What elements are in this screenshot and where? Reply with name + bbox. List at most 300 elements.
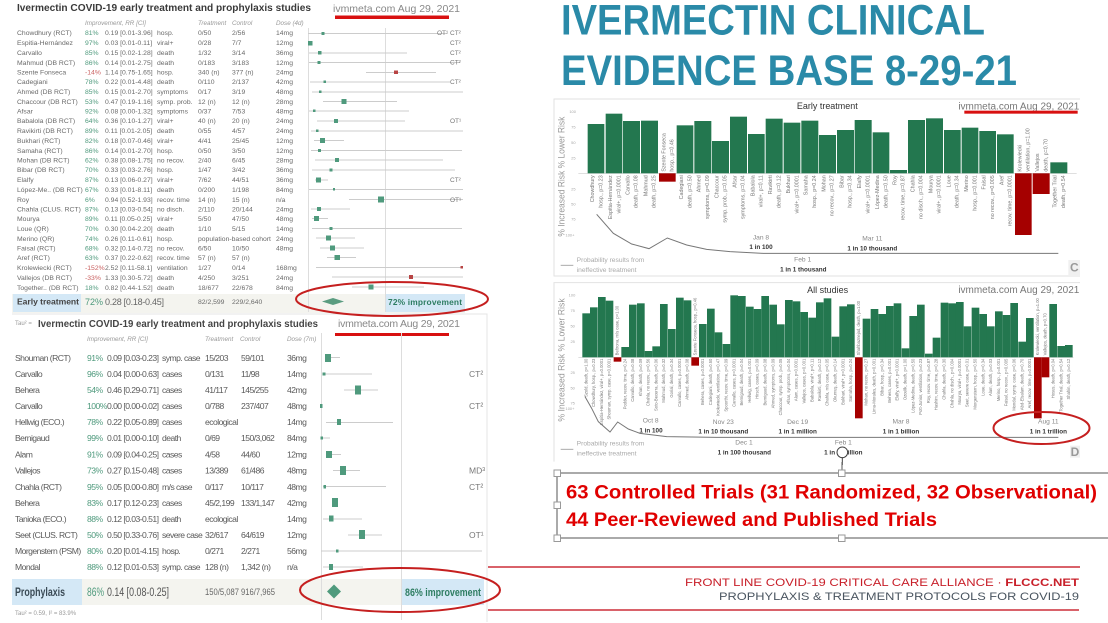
table rows: early treatment studies: Cadegiani (17, 79, 48, 86)
probability annotations: 1 in 10 thousand (698, 429, 748, 436)
study labels: Roy, recov. time, p=0.87 (926, 358, 931, 403)
table rows: early treatment studies: 97% (85, 40, 99, 47)
chart heading: Early treatment (797, 101, 858, 111)
table rows: early treatment studies: hosp. (157, 148, 174, 155)
table rows: early treatment studies: 0.82 [0.44-1.52] (105, 285, 153, 292)
table rows: early treatment studies: 1/32 (198, 50, 211, 57)
study labels: viral+, p=0.0001 (616, 175, 622, 214)
study labels: Together Trial, death, p=0.54 (1058, 358, 1063, 412)
table rows: early treatment studies: hosp. (157, 236, 174, 243)
study labels: Chahla, m/s case, p=0.05 (825, 358, 830, 406)
study labels: Bibar (839, 175, 845, 188)
summary row: prophylaxis: 86% improvement (405, 587, 481, 599)
table rows: prophylaxis studies: 91% (87, 450, 103, 460)
study labels: Gorial, death, p=0.34 (669, 358, 674, 398)
table rows: early treatment studies: Merino (QR) (17, 236, 54, 243)
probability annotations (749, 234, 897, 273)
table rows: early treatment studies: Ravikirti (DB RCT) (17, 128, 73, 135)
table rows: early treatment studies: 3/42 (232, 167, 245, 174)
table rows: prophylaxis studies: 150/3,062 (241, 433, 275, 443)
table rows: early treatment studies: 0.36 [0.10-1.27] (105, 118, 153, 125)
y axis: 50 (570, 386, 576, 391)
probability annotations: Nov 23 (713, 419, 734, 426)
table rows: early treatment studies: Afsar (17, 108, 34, 116)
table rows: early treatment studies: Chahla (CLUS. RCT) (17, 206, 81, 214)
panel letter D: D (1071, 445, 1080, 459)
table rows: prophylaxis studies: 0.17 [0.12-0.23] (107, 498, 159, 508)
study labels: Aref (999, 175, 1005, 185)
study labels: Bukhari, viral+, p=0.0001 (840, 358, 845, 405)
table rows: prophylaxis studies: 133/1,147 (241, 498, 275, 508)
table rows: early treatment studies: 7/62 (198, 177, 211, 184)
y axis: 100 (569, 109, 577, 114)
study labels: Faisal (982, 175, 988, 190)
table rows: early treatment studies: -152% (85, 265, 105, 272)
study labels: Ravikirti (768, 175, 774, 194)
table rows: prophylaxis studies: 0.09 [0.04-0.25] (107, 450, 159, 460)
table rows: prophylaxis studies: Carvallo (15, 401, 43, 411)
probability annotations: Mar 11 (862, 235, 883, 242)
table rows: prophylaxis studies: ecological (205, 417, 238, 427)
panel: chart C early treatment (554, 99, 1080, 276)
y axis: 75 (571, 217, 576, 222)
table rows: early treatment studies: 3/14 (232, 50, 245, 57)
icon: rotate cursor handle (837, 447, 848, 465)
table rows: early treatment studies: 87% (85, 177, 99, 184)
probability annotations: Mar 8 (892, 419, 910, 426)
table rows: prophylaxis studies: 0.46 [0.29-0.71] (107, 385, 159, 395)
probability annotations: Dec 1 (735, 440, 753, 447)
table rows: prophylaxis studies: 73% (87, 466, 103, 476)
table rows: early treatment studies: Mourya (17, 216, 40, 223)
study labels: recov. time, p=0.0001 (1008, 175, 1014, 226)
risk-of-bias notes: CT² (450, 40, 462, 47)
study labels: Chaccour, symp. prob., p=0.05 (778, 358, 783, 415)
table rows: early treatment studies: 1.14 [0.75-1.65] (105, 70, 153, 76)
study labels: death, p=0.50 (687, 175, 693, 208)
study labels: Afsar, symptoms, p=0.04 (786, 358, 791, 405)
panel: early treatment forest table (12, 3, 465, 313)
table rows: prophylaxis studies: 48mg (287, 482, 307, 492)
table rows: early treatment studies: n/a (276, 197, 286, 204)
table rows: early treatment studies: 3/19 (232, 89, 245, 96)
study labels: Hashim, recov. time, p=0.28 (934, 358, 939, 410)
study labels: Loue (946, 175, 952, 187)
table rows: early treatment studies: -33% (85, 275, 101, 282)
forest plot: prophylaxis (320, 333, 482, 620)
risk-of-bias notes: OT¹ (450, 118, 462, 125)
study labels: Mondal, symp. case, p=0.06 (1011, 358, 1016, 411)
table rows: early treatment studies: 14mg (276, 30, 293, 37)
table rows: prophylaxis studies: 0.00 [0.00-0.02] (107, 401, 159, 411)
y axis: 100+ (566, 232, 575, 237)
table rows: prophylaxis studies: 42mg (287, 498, 307, 508)
table rows: early treatment studies: 340 (n) (198, 70, 220, 76)
table rows: early treatment studies: 0.38 [0.08-1.75] (105, 158, 153, 164)
study labels: hosp., p=0.23 (598, 175, 604, 208)
study labels: Hosus, death, p=0.04 (1050, 358, 1055, 398)
study labels: Carvallo, cases, p=0.0001 (677, 358, 682, 407)
table rows: early treatment studies: death (157, 275, 174, 282)
summary row: early treatment: 72% improvement (388, 297, 462, 307)
table rows: early treatment studies: 0.94 [0.52-1.93] (105, 197, 153, 204)
table rows: early treatment studies: 0/14 (232, 265, 245, 272)
table rows: early treatment studies: -14% (85, 70, 101, 76)
table rows: early treatment studies: 78% (85, 79, 99, 86)
table rows: prophylaxis studies: 91% (87, 353, 103, 363)
risk-of-bias notes: OT¹ (469, 530, 484, 540)
study labels: symp. prob., p=0.05 (723, 175, 729, 223)
probability annotations: 1 in 100 (639, 427, 663, 434)
table rows: early treatment studies: 0.08 [0.00-1.32] (105, 108, 153, 116)
y axis: % Increased Risk % Lower Risk (556, 116, 566, 237)
study labels: Alam, death, p=0.03 (988, 358, 993, 396)
table rows: prophylaxis studies: 0.01 [0.00-0.10] (107, 433, 159, 443)
study labels: symptoms, p=0.09 (705, 175, 711, 219)
table rows: early treatment studies: 1/10 (198, 226, 211, 233)
table rows: prophylaxis studies: 0.05 [0.00-0.80] (107, 482, 159, 492)
study labels: López-Medina, death, p=0.50 (910, 358, 915, 413)
table rows: prophylaxis studies: 145/255 (241, 385, 269, 395)
table rows: early treatment studies: symptoms (157, 89, 189, 96)
table rows: early treatment studies: 84mg (276, 187, 293, 194)
source: ivmmeta date: ivmmeta.com Aug 29, 2021 (958, 285, 1080, 296)
table rows: early treatment studies: no recov. (157, 246, 185, 252)
study labels: Mohan (821, 175, 827, 192)
table rows: early treatment studies: 14mg (276, 226, 293, 233)
table rows: prophylaxis studies: 14mg (287, 369, 307, 379)
table rows: early treatment studies: 0.15 [0.02-1.28] (105, 50, 153, 57)
column headers: Control (240, 336, 261, 343)
legend: probability line (561, 257, 645, 274)
study labels: Mourya, viral+, p=0.0001 (957, 358, 962, 405)
table rows: early treatment studies: recov. time (157, 197, 190, 204)
table rows: prophylaxis studies: 64/619 (241, 530, 265, 540)
study labels: death, p=0.50 (883, 175, 889, 208)
table rows: early treatment studies: 0.37 [0.22-0.62] (105, 255, 153, 262)
table rows: prophylaxis studies: 83% (87, 498, 103, 508)
table rows: prophylaxis studies: cases (162, 417, 182, 427)
callout: red ellipse early treatment (296, 282, 488, 316)
summary row: prophylaxis (12, 579, 484, 605)
table rows: prophylaxis studies: 0.22 [0.05-0.89] (107, 417, 159, 427)
table rows: prophylaxis studies: 95% (87, 482, 103, 492)
risk-of-bias notes: CT² (469, 401, 483, 411)
callout box: trial counts (554, 462, 1108, 542)
table rows: early treatment studies: 0.33 [0.03-2.76] (105, 167, 153, 174)
table rows: prophylaxis studies: 56mg (287, 546, 307, 556)
study labels: Bernigaud, death, p=0.04 (739, 358, 744, 405)
legend: probability line (561, 441, 645, 458)
study labels: Hellwig, cases, p=0.001 (747, 358, 752, 403)
y axis: 100+ (566, 406, 575, 411)
study labels: Alam, cases, p=0.0001 (794, 358, 799, 401)
red underline (964, 111, 1078, 114)
table rows: prophylaxis studies: death (162, 433, 182, 443)
table rows: prophylaxis studies: 59/101 (241, 353, 265, 363)
study labels: López-Medina (875, 175, 881, 209)
source: ivmmeta date: ivmmeta.com Aug 29, 2021 (333, 3, 460, 15)
study labels: Espitia-Hernández, viral+, p=0.0001 (599, 358, 604, 425)
table rows: early treatment studies: population-based cohort (198, 236, 271, 243)
column headers: Treatment (198, 20, 226, 27)
study labels: Mourya (928, 175, 934, 193)
probability annotations: Jan 8 (753, 234, 769, 241)
study labels: hosp., p=0.001 (972, 175, 978, 211)
study labels: Afsar (732, 175, 738, 188)
table rows: prophylaxis studies: 14mg (287, 417, 307, 427)
legend: probability line: Probability results from (577, 441, 645, 448)
summary row: early treatment: 72% (85, 297, 103, 307)
study labels: Espitia-Hernández (608, 175, 614, 219)
column headers: Control (232, 20, 253, 27)
table rows: early treatment studies: 0.32 [0.14-0.72] (105, 246, 153, 252)
summary row: early treatment (12, 294, 465, 313)
table rows: early treatment studies: death (157, 128, 174, 135)
table rows: prophylaxis studies: m/s case (162, 482, 193, 492)
table rows: early treatment studies: 20 (n) (232, 118, 250, 125)
forest plot: early treatment (308, 28, 463, 312)
table rows: early treatment studies: 0/110 (198, 79, 215, 86)
study labels: Loue, death, p=0.34 (980, 358, 985, 396)
study labels: Szente Fonseca, hosp., p=0.46 (692, 297, 697, 355)
legend: probability line: ineffective treatment (577, 451, 637, 458)
table rows: prophylaxis studies: Bernigaud (15, 433, 50, 443)
table rows: prophylaxis studies: 13/389 (205, 466, 229, 476)
probability annotations (639, 418, 1067, 457)
table rows: early treatment studies: viral+ (157, 40, 173, 47)
table rows: early treatment studies: 48mg (276, 89, 293, 96)
probability annotations: Feb 1 (794, 256, 811, 263)
table rows: early treatment studies: Bukhari (RCT) (17, 138, 60, 145)
study labels: Chahla, no recov., p=0.56 (646, 358, 651, 406)
heading: early treatment table: Ivermectin COVID-19 early treatment and prophylaxis studies (17, 3, 311, 14)
table rows: early treatment studies: 53% (85, 99, 99, 106)
table rows: early treatment studies: Mahmud (DB RCT) (17, 60, 75, 67)
table rows: early treatment studies: 84mg (276, 285, 293, 292)
study labels: Ravikirti, death, p=0.12 (817, 358, 822, 401)
study labels: Bukhari (786, 175, 792, 193)
table rows: early treatment studies: 0.11 [0.05-0.25] (105, 216, 152, 223)
study labels: Merino (964, 175, 970, 192)
study labels: Morgenstern, hosp., p=0.50 (973, 358, 978, 410)
table rows: prophylaxis studies: 41/117 (205, 385, 228, 395)
table rows: early treatment studies: Carvallo (17, 50, 42, 57)
table rows: early treatment studies: Roy (17, 197, 30, 204)
y axis: 100 (569, 293, 576, 298)
table rows: prophylaxis studies: 14mg (287, 514, 307, 524)
table rows: early treatment studies: 48mg (276, 216, 293, 223)
study labels: hosp., p=0.34 (848, 175, 854, 208)
table rows: early treatment studies: Chowdhury (RCT) (17, 30, 72, 37)
table rows: early treatment studies: 48mg (276, 108, 293, 116)
table rows: early treatment studies: 20/144 (232, 206, 253, 214)
table rows: early treatment studies: 22/678 (232, 285, 253, 292)
risk-of-bias notes: CT² (469, 482, 483, 492)
column headers: Dose (4d) (276, 20, 304, 27)
table rows: early treatment studies: 0.19 [0.01-3.96] (105, 30, 153, 37)
table rows: early treatment studies: 2/110 (198, 206, 215, 214)
table rows: early treatment studies: 1/47 (198, 167, 211, 174)
table rows: early treatment studies: 89% (85, 128, 99, 135)
table rows: prophylaxis studies: 99% (87, 433, 103, 443)
table rows: early treatment studies: 0/50 (198, 30, 211, 37)
table rows: early treatment studies: death (157, 60, 174, 67)
table rows: prophylaxis studies: 80% (87, 546, 103, 556)
probability annotations: 1 in 1 thousand (780, 266, 827, 273)
table rows: prophylaxis studies: 96% (87, 369, 103, 379)
table rows: prophylaxis studies: 0/788 (205, 401, 225, 411)
table rows: early treatment studies: Szente Fonseca (17, 70, 66, 76)
table rows: prophylaxis studies: 128 (n) (205, 562, 229, 572)
table rows: early treatment studies: 0/183 (198, 60, 215, 67)
table rows: prophylaxis studies: Vallejos (15, 466, 40, 476)
y axis: 50 (571, 140, 576, 145)
table rows: early treatment studies: 62% (85, 158, 99, 164)
study labels: viral+, p=0.0001 (937, 175, 943, 214)
table rows: prophylaxis studies: Mondal (15, 562, 41, 572)
study labels: Krolewiecki (1017, 145, 1023, 172)
panel letter C (1068, 260, 1080, 275)
probability annotations: Feb 1 (835, 440, 852, 447)
table rows: prophylaxis studies: Tanioka (ECO.) (15, 514, 67, 524)
table rows: early treatment studies: 25/45 (232, 138, 249, 145)
summary row: early treatment: Early treatment (17, 296, 79, 306)
table rows: early treatment studies: viral+ (157, 177, 173, 184)
y axis: 50 (570, 324, 576, 329)
study labels: death, p=0.34 (955, 175, 961, 208)
table rows: early treatment studies: 0.30 [0.04-2.20] (105, 226, 153, 233)
table rows: prophylaxis studies: Shouman (RCT) (15, 353, 71, 363)
table rows: prophylaxis studies: death (162, 514, 182, 524)
table rows: early treatment studies: 70% (85, 167, 99, 174)
table rows: early treatment studies: 0/50 (198, 148, 211, 155)
table rows: prophylaxis studies: 0.20 [0.01-4.15] (107, 546, 159, 556)
table rows: early treatment studies: Elalfy (17, 177, 34, 184)
table rows: prophylaxis studies: 54% (87, 385, 103, 395)
study labels: Chahla, death, p=0.30 (942, 358, 947, 400)
study labels: Chahla (910, 175, 916, 192)
risk-of-bias notes: OT¹ (450, 197, 462, 204)
risk-of-bias notes: CT² (450, 50, 462, 57)
column headers: Dose (7m) (287, 336, 316, 343)
table rows: early treatment studies: no recov. (157, 158, 185, 164)
table rows: prophylaxis studies: 0.04 [0.00-0.63] (107, 369, 159, 379)
table rows: early treatment studies: Loue (QR) (17, 226, 49, 233)
probability annotations: Oct 8 (643, 418, 659, 425)
table rows: early treatment studies: recov. time (157, 255, 190, 262)
table rows: early treatment studies: 14 (n) (198, 197, 216, 204)
table rows: early treatment studies: 168mg (276, 265, 297, 272)
y axis: 25 (570, 339, 576, 344)
study labels: recov. time, p=0.87 (901, 175, 907, 220)
table rows: early treatment studies: 40 (n) (198, 118, 216, 125)
table rows: early treatment studies: 86% (85, 60, 99, 67)
study labels: Ahmed, symptoms, p=0.09 (770, 358, 775, 408)
heading: prophylaxis table: Ivermectin COVID-19 early treatment and prophylaxis studies (38, 319, 318, 330)
table rows: prophylaxis studies: Carvallo (15, 369, 43, 379)
footer: FLCCC branding: PROPHYLAXIS & TREATMENT PROTOCOLS FOR COVID-19 (719, 591, 1079, 603)
table rows: early treatment studies: Together.. (DB RCT) (17, 285, 79, 292)
study labels: Chowdhury (590, 175, 596, 202)
table rows: early treatment studies: 12mg (276, 60, 293, 67)
table rows: prophylaxis studies: cases (162, 466, 182, 476)
study labels: Behera, cases, p=0.0001 (700, 358, 705, 405)
table rows: prophylaxis studies: 12mg (287, 450, 307, 460)
table rows: early treatment studies: Samaha (RCT) (17, 148, 63, 155)
table rows: early treatment studies (17, 30, 297, 292)
table rows: early treatment studies: 12mg (276, 138, 293, 145)
study labels: Elalfy, viral+, p=0.0001 (895, 358, 900, 401)
table rows: prophylaxis studies: 4/58 (205, 450, 220, 460)
table rows: prophylaxis studies: 44/60 (241, 450, 261, 460)
table rows: early treatment studies: 15 (n) (232, 197, 250, 204)
callout: red ellipse 1 in 1 trillion (994, 412, 1090, 444)
probability annotations: 1 in 100 (749, 244, 773, 251)
table rows: early treatment studies: hosp. (157, 167, 174, 174)
table rows: early treatment studies: López-Me.. (DB RCT) (17, 187, 83, 194)
study labels: death, p=0.70 (1043, 139, 1049, 172)
summary row: prophylaxis: 150/5,087 916/7,965 (205, 587, 275, 597)
legend: probability line: ineffective treatment (577, 267, 637, 274)
table rows: prophylaxis studies: Hellwig (ECO.) (15, 417, 65, 427)
table rows: early treatment studies: 42mg (276, 79, 293, 86)
table rows: early treatment studies: 0.47 [0.19-1.16] (105, 99, 153, 106)
table rows: early treatment studies: Faisal (RCT) (17, 246, 56, 252)
study labels: Ozcelik, death, p=1.00 (903, 358, 908, 400)
table rows: early treatment studies: 1/27 (198, 265, 211, 272)
table rows: early treatment studies: 63% (85, 255, 99, 262)
study labels: Chowdhury, hosp., p=0.23 (591, 358, 596, 407)
table rows: early treatment studies: 24mg (276, 275, 293, 282)
table rows: early treatment studies: death (157, 50, 174, 57)
table rows: early treatment studies: 87% (85, 206, 99, 214)
table rows: prophylaxis studies: 0.12 [0.01-0.53] (107, 562, 159, 572)
trial counts line 2: 44 Peer-Reviewed and Published Trials (566, 509, 937, 531)
footer: FLCCC branding (488, 567, 1080, 610)
study labels: Aref, recov. time, p=0.0001 (1027, 358, 1032, 408)
table rows: early treatment studies: 81% (85, 30, 99, 37)
study labels: Carvallo, cases, p=0.0001 (731, 358, 736, 407)
table rows: early treatment studies: 12mg (276, 148, 293, 155)
panel: prophylaxis forest table (12, 314, 487, 622)
table rows: early treatment studies: 36mg (276, 177, 293, 184)
study labels: Cadegiani, death, p=0.50 (708, 358, 713, 405)
table rows: early treatment studies: 2/40 (198, 158, 211, 164)
table rows: early treatment studies: 85% (85, 89, 99, 96)
column headers: Improvement, RR [CI] (85, 20, 146, 27)
panel letter C: C (1070, 261, 1079, 275)
probability annotations: 1 in 1 million (824, 450, 863, 457)
study labels: Vallejos, death, p=0.70 (1043, 313, 1048, 355)
y axis: 75 (570, 400, 576, 405)
probability annotations: Aug 11 (1038, 419, 1059, 426)
probability curve (597, 214, 1058, 253)
table rows: early treatment studies: 74% (85, 236, 99, 243)
table rows: early treatment studies: 3/183 (232, 60, 249, 67)
summary row: early treatment: 82/2,599 (198, 299, 225, 306)
table rows: early treatment studies: 5/15 (232, 226, 245, 233)
study labels: Chaccour (714, 175, 720, 198)
table rows: prophylaxis studies: cases (162, 498, 182, 508)
heterogeneity note: Tau² = 0.59, I² = 83.9% (15, 611, 77, 617)
study labels: hosp., p=0.24 (812, 175, 818, 208)
bar chart: all studies (582, 295, 1073, 418)
table rows: early treatment studies: Vallejos (DB RCT) (17, 275, 72, 282)
study labels: Soto-Becerra, death, p=0.06 (653, 358, 658, 411)
table rows: prophylaxis studies: symp. case (162, 562, 201, 572)
table rows: early treatment studies: 47/50 (232, 216, 249, 223)
